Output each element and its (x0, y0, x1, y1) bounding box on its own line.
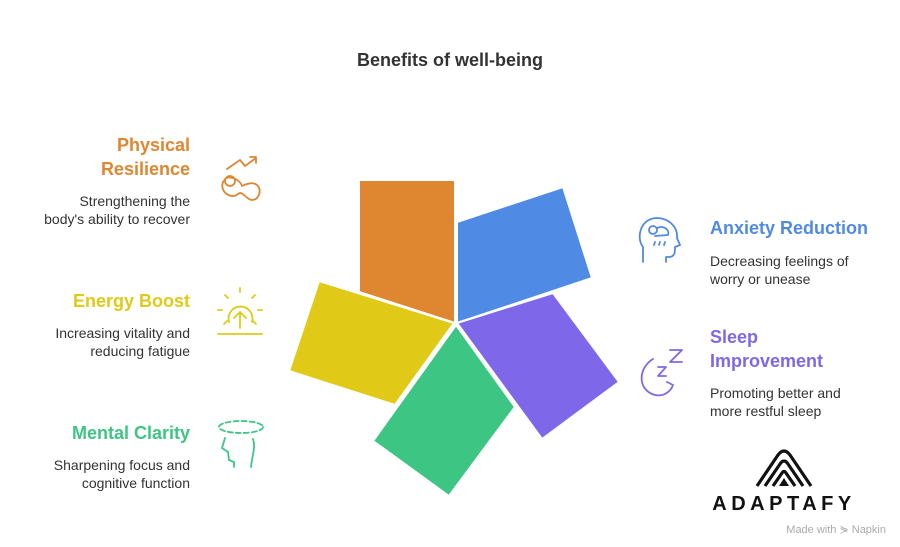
block: energy boost: reducing fatigue (90, 343, 190, 359)
block: sleep improvement: Improvement (710, 351, 823, 371)
footer: made with napkin: Made with ⋟ Napkin (786, 524, 886, 536)
block: mental clarity (54, 423, 190, 491)
block: physical resilience: body's ability to recover (44, 211, 190, 227)
icon: moon with z (642, 350, 682, 395)
block: anxiety reduction: Anxiety Reduction (710, 218, 868, 238)
petal: mental clarity (373, 325, 515, 496)
block: energy boost: Energy Boost (73, 291, 190, 311)
block: energy boost: Increasing vitality and (55, 325, 190, 341)
block: anxiety reduction: Decreasing feelings of (710, 253, 849, 269)
petal: energy boost (289, 281, 454, 405)
icon: head with cloud (640, 218, 680, 262)
block: physical resilience: Resilience (101, 159, 190, 179)
block: mental clarity: Mental Clarity (72, 423, 190, 443)
block: sleep improvement: more restful sleep (710, 403, 821, 419)
icon: sunrise (218, 288, 262, 334)
petal: anxiety reduction (457, 187, 592, 323)
petal: sleep improvement (457, 293, 619, 439)
block: energy boost (55, 291, 190, 359)
pentagon petal chart (289, 180, 619, 496)
block: mental clarity: Sharpening focus and (54, 457, 190, 473)
petal: physical resilience (359, 180, 455, 323)
block: sleep improvement (710, 327, 841, 419)
block: physical resilience: Physical (117, 135, 190, 155)
icon: physical resilience (222, 157, 260, 200)
block: anxiety reduction (709, 218, 868, 287)
block: sleep improvement: Promoting better and (710, 385, 841, 401)
block: sleep improvement: Sleep (710, 327, 758, 347)
block: physical resilience: Strengthening the (79, 193, 190, 209)
block: physical resilience (44, 135, 190, 227)
block: anxiety reduction: worry or unease (709, 271, 811, 287)
title: Benefits of well-being (357, 50, 543, 70)
block: mental clarity: cognitive function (82, 475, 190, 491)
logo: adaptafy (712, 451, 856, 515)
icon: head with halo (219, 421, 263, 467)
logo: adaptafy: ADAPTAFY (712, 493, 856, 515)
